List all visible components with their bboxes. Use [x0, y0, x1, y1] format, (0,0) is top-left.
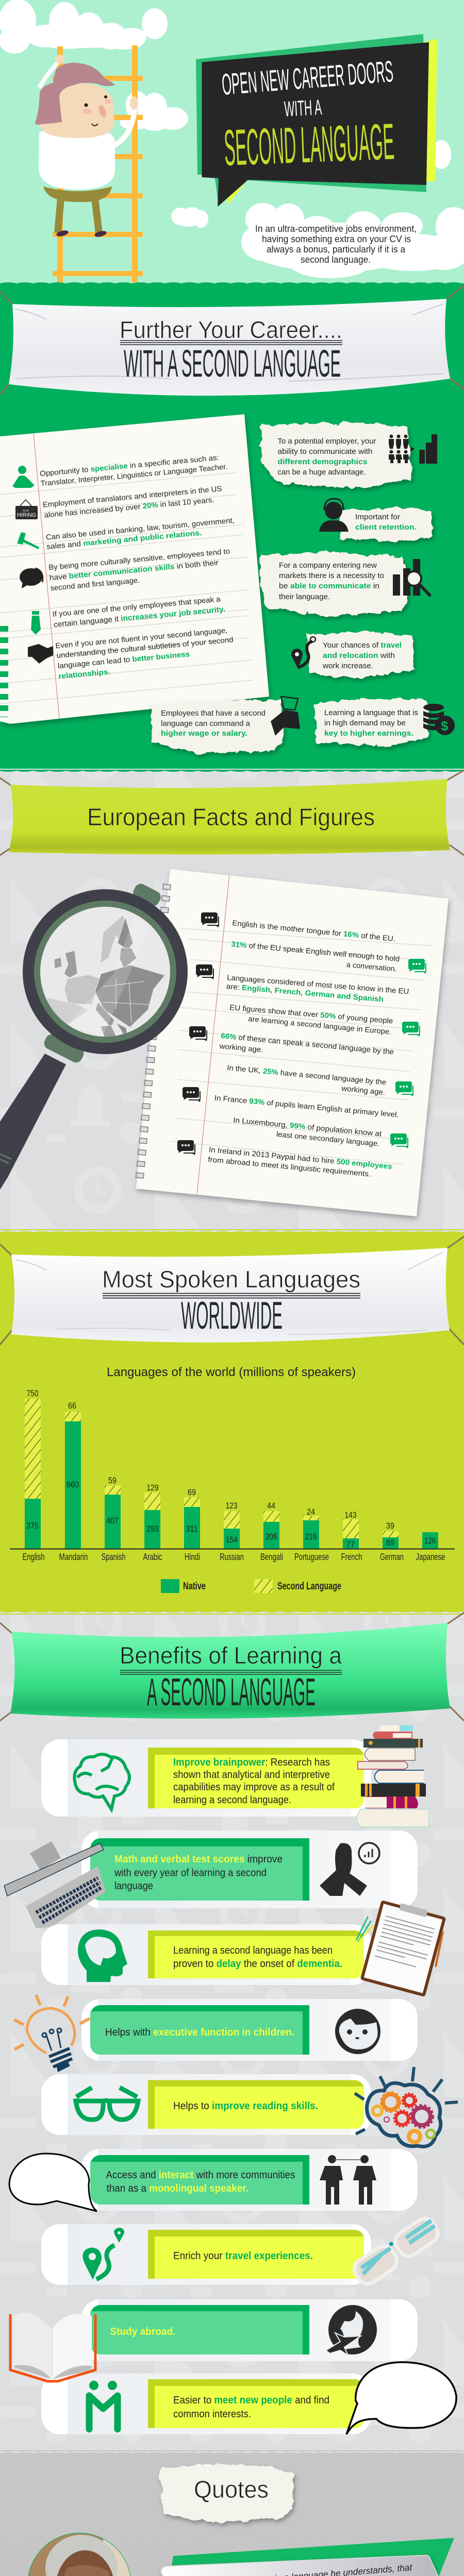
title text: [221, 55, 395, 176]
banner heading: European Facts and Figures: [87, 803, 375, 831]
paper text lines: Languages considered of most use to know in the EU: [227, 974, 409, 996]
paper text lines: are learning a second language in Europe.: [248, 1015, 392, 1037]
card: executive function: Helps with executive function in children.: [105, 2027, 294, 2038]
paper text lines: language can lead to better business: [57, 650, 190, 670]
chart legend: Second Language: [277, 1581, 341, 1592]
paper text lines: EU figures show that over 50% of young people: [229, 1004, 393, 1026]
paper text lines: a conversation.: [346, 961, 397, 974]
card: improve brainpower: capabilities may improve as a result of: [173, 1782, 335, 1793]
card: meet new people: Easier to meet new people and find: [173, 2395, 329, 2406]
notebook paper: European facts: [136, 869, 449, 1216]
icon: headset agent: [319, 499, 349, 532]
quotes section background: [0, 2453, 464, 2576]
paper text lines: Opportunity to specialise in a specific area such as:: [39, 454, 219, 478]
notebook paper: career benefits: [0, 414, 269, 724]
paper text lines: English is the mother tongue for 16% of the EU.: [232, 919, 396, 943]
card: study abroad: [81, 2299, 418, 2361]
paper text lines: By being more culturally sensitive, employees tend to: [48, 547, 230, 572]
card: improve reading skills: Helps to improve reading skills.: [173, 2100, 318, 2112]
category labels: Bengali: [260, 1552, 283, 1562]
paper text lines: working age.: [219, 1042, 263, 1054]
banner heading: WORLDWIDE: [181, 1294, 283, 1337]
lime section background: [0, 1232, 464, 1612]
title speech bubble: [196, 34, 437, 207]
card: math and verbal test scores: [81, 1831, 418, 1908]
native bars: [25, 1421, 438, 1549]
category labels: English: [23, 1552, 44, 1562]
paper text lines: 66% of these can speak a second language by the: [221, 1032, 394, 1057]
wave edge hero to green: [0, 281, 464, 284]
card: delay dementia: [41, 1924, 371, 1985]
wave edge green to grey: [0, 769, 464, 772]
icon: businessman with chart bubble: [320, 1843, 379, 1896]
banner: most spoken languages: [0, 1236, 464, 1345]
bar value labels: 154: [226, 1535, 237, 1545]
note: travel and relocation: work increase.: [322, 662, 373, 670]
bar value labels: 89: [386, 1538, 394, 1548]
note: new markets: be able to communicate in: [279, 582, 379, 590]
icon: hand with money: [271, 697, 300, 736]
icon: light bulb: [14, 1995, 90, 2072]
second language bars: [25, 1399, 399, 1538]
magnifying glass over Europe map: [0, 882, 188, 1190]
icon: two people shaking hands: [89, 2381, 118, 2429]
paper text lines: least one secondary language.: [276, 1130, 380, 1148]
banner heading: Benefits of Learning a: [120, 1642, 342, 1669]
paper text lines: Translator, Interpreter, Linguistics or Language Teacher.: [40, 463, 228, 488]
intro text: having something extra on your CV is: [262, 234, 411, 244]
banner heading: Most Spoken Languages: [102, 1266, 360, 1293]
icon: tie: [31, 611, 41, 635]
grey section background: benefits: [0, 1612, 464, 2453]
intro text: always a bonus, particularly if it is a: [267, 244, 406, 255]
photo: Nelson Mandela: [26, 2532, 134, 2576]
bar chart: languages of the world: [10, 1388, 455, 1562]
icon: teal glasses: [351, 2214, 442, 2288]
paper text lines: In Ireland in 2013 Paypal had to hire 500 employees: [208, 1146, 392, 1171]
green section background: [0, 284, 464, 769]
card: study abroad: Study abroad.: [110, 2326, 175, 2337]
note: travel and relocation: Your chances of travel: [323, 641, 402, 650]
note: client retention: [319, 499, 432, 542]
bar value labels: 44: [267, 1501, 275, 1511]
bar value labels: 39: [386, 1521, 394, 1531]
note: different demographics: To a potential employer, your: [277, 437, 376, 446]
wave edge lime to grey: [0, 1612, 464, 1615]
bar value labels: 66: [68, 1401, 76, 1411]
banner heading: [120, 316, 342, 385]
banner heading: Further Your Career....: [120, 316, 342, 343]
clouds in hero: [0, 0, 464, 278]
paper text lines: If you are one of the only employees that speak a: [52, 595, 221, 619]
icon: stack of books: [357, 1725, 429, 1827]
quote bubble: Mandela: [158, 2538, 454, 2576]
note: client retention: client retention.: [355, 523, 417, 532]
paper text lines: working age.: [341, 1084, 386, 1097]
card: improve reading skills: [41, 2074, 371, 2135]
note: new markets: For a company entering new: [279, 562, 377, 570]
paper text lines: In the UK, 25% have a second language by the: [227, 1064, 387, 1087]
grey section background: European facts: [0, 769, 464, 1232]
chart legend: [161, 1579, 341, 1593]
bar value labels: 129: [146, 1483, 159, 1493]
paper text lines: 31% of the EU speak English well enough to hold: [231, 940, 400, 963]
note: new markets: markets there is a necessity to: [279, 572, 384, 580]
note: quotes heading: Quotes: [194, 2476, 269, 2503]
bar value labels: 750: [27, 1388, 38, 1398]
icon: handshake: [28, 644, 53, 664]
paper text lines: from abroad to meet its linguistic requirements.: [208, 1156, 371, 1179]
card: math and verbal test scores: language: [114, 1880, 153, 1892]
card: meet new people: common interests.: [173, 2409, 251, 2420]
ladder: [53, 45, 143, 282]
intro text: In an ultra-competitive jobs environment,: [255, 224, 417, 234]
paper text lines: Employment of translators and interpreters in the US: [42, 485, 222, 510]
bar value labels: 375: [27, 1521, 38, 1531]
bar value labels: 960: [67, 1480, 79, 1489]
note: client retention: Important for: [355, 513, 400, 521]
bar value labels: 77: [346, 1539, 355, 1549]
note: new markets: their language.: [279, 593, 330, 601]
hero background: [0, 0, 464, 284]
card: improve brainpower: [41, 1739, 371, 1817]
character climbing ladder: [35, 55, 138, 238]
note: different demographics: can be a huge advantage.: [277, 468, 366, 477]
bar value labels: 24: [307, 1507, 315, 1517]
bar value labels: 293: [146, 1524, 159, 1534]
spiral holes: [0, 626, 8, 717]
category labels: French: [341, 1552, 362, 1562]
card: math and verbal test scores: with every year of learning a second: [114, 1867, 267, 1878]
bar value labels: 123: [226, 1501, 237, 1511]
chart title: Languages of the world (millions of speakers): [107, 1365, 356, 1379]
category labels: German: [380, 1552, 404, 1562]
paper text lines: In France 93% of pupils learn English at primary level.: [214, 1094, 399, 1120]
icon: people and bars: [389, 434, 437, 464]
card: executive function: [81, 1999, 418, 2061]
card: interact with communities: Access and interact with more communities: [106, 2170, 295, 2181]
chart legend: Native: [183, 1581, 206, 1592]
icon: speech bubbles: [20, 568, 43, 588]
paper text lines: [39, 454, 235, 681]
paper text lines: understanding the cultural subtleties of your second: [56, 636, 234, 660]
banner: European facts: [0, 770, 464, 855]
category labels: Mandarin: [59, 1552, 88, 1562]
card: travel experiences: [41, 2224, 371, 2285]
bar value labels: 216: [305, 1532, 317, 1541]
note: higher earnings: key to higher earnings.: [324, 730, 413, 738]
icon: person reading: [12, 466, 35, 488]
icon: chat bubbles: [177, 912, 219, 1155]
note: travel and relocation: and relocation with: [323, 652, 395, 660]
title text: WITH A: [284, 95, 322, 121]
category labels: Portuguese: [294, 1552, 329, 1562]
card: improve brainpower: learning a second language.: [173, 1794, 291, 1806]
bar value labels: [27, 1388, 436, 1549]
note: different demographics: ability to communicate with: [277, 448, 372, 456]
icon: globe with plane: [326, 2305, 377, 2355]
note: higher wage: Employees that have a second: [161, 709, 266, 718]
paper text lines: Can also be used in banking, law, tourism, government,: [45, 516, 235, 542]
paper text lines: [208, 919, 409, 1179]
note: higher wage: higher wage or salary.: [161, 730, 247, 738]
icon: brain with gears: [355, 2067, 458, 2146]
bar value labels: 143: [344, 1510, 357, 1520]
card: delay dementia: proven to delay the onset of dementia.: [173, 1958, 342, 1970]
icon: now hiring sign: [15, 500, 38, 519]
paper text lines: sales and marketing and public relations.: [46, 529, 202, 551]
icon: map route: [82, 2228, 124, 2280]
note: higher earnings: Learning a language that is: [324, 709, 418, 717]
note: travel and relocation: [291, 631, 415, 678]
intro text: [255, 224, 417, 265]
category labels: Arabic: [143, 1552, 162, 1562]
category labels: Russian: [220, 1552, 244, 1562]
card: interact with communities: [81, 2149, 418, 2211]
icon: speech bubble left: [9, 2154, 97, 2211]
category labels: Japanese: [416, 1552, 445, 1562]
paper text lines: In Luxembourg, 99% of population know at: [233, 1116, 382, 1139]
paper text lines: have better communication skills in both their: [49, 559, 219, 582]
paper text lines: relationships.: [58, 668, 111, 681]
card: meet new people: [41, 2374, 371, 2434]
icon: child face: [335, 2009, 380, 2054]
note: different demographics: [260, 422, 437, 487]
note: higher wage: [151, 697, 300, 753]
icon: glasses: [76, 2088, 138, 2120]
bar value labels: 206: [265, 1532, 277, 1541]
category labels: [23, 1552, 445, 1562]
icon: laptop keyboard: [4, 1841, 106, 1928]
paper text lines: second and first language.: [50, 577, 140, 592]
wave edge grey to quotes: [0, 2450, 464, 2453]
note: higher earnings: [314, 699, 455, 746]
card: improve brainpower: Improve brainpower: Research has: [173, 1757, 330, 1768]
icon: speech bubble right: [346, 2362, 456, 2434]
map of Europe: [47, 914, 165, 1046]
note: different demographics: different demographics: [277, 458, 367, 466]
wave edge grey to lime: [0, 1229, 464, 1232]
icon: gavel: [17, 532, 39, 549]
icon: two people with tin-can phone: [320, 2155, 376, 2205]
paper text lines: certain language it increases your job security.: [53, 605, 225, 629]
note: quotes heading: [159, 2464, 294, 2522]
note: new markets: [260, 552, 430, 616]
paper text lines: Even if you are not fluent in your second language,: [55, 626, 228, 650]
note: higher wage: language can command a: [161, 720, 251, 728]
card: travel experiences: Enrich your travel experiences.: [173, 2250, 313, 2262]
bar value labels: 69: [188, 1487, 196, 1497]
icon: now hiring sign: NOW: [23, 510, 29, 513]
icon: head with brain: [78, 1929, 127, 1982]
paper text lines: are: English, French, German and Spanish: [226, 982, 384, 1004]
banner heading: [102, 1266, 360, 1337]
bar value labels: 126: [424, 1536, 436, 1546]
icon: brain outline: [74, 1754, 129, 1809]
intro text: second language.: [301, 255, 371, 265]
category labels: Spanish: [101, 1552, 126, 1562]
card: improve brainpower: shown that analytical and interpretive: [173, 1769, 330, 1781]
card: interact with communities: than as a monolingual speaker.: [107, 2183, 248, 2194]
banner: further your career: [0, 286, 464, 396]
card: delay dementia: Learning a second language has been: [173, 1945, 333, 1956]
banner: benefits of learning: [0, 1613, 464, 1721]
icon: coins and dollar: [423, 704, 455, 735]
icon: map route: [291, 637, 316, 669]
spiral holes: [139, 884, 167, 1182]
note: higher earnings: in high demand may be: [324, 719, 406, 727]
icon: open book: [10, 2313, 95, 2381]
icon: green chat bubbles: [390, 959, 426, 1148]
bar value labels: 59: [108, 1476, 117, 1485]
icon: bars and magnifier: [393, 559, 430, 596]
bar value labels: 311: [186, 1524, 198, 1534]
banner heading: [120, 1642, 342, 1714]
paper text lines: alone has increased by over 20% in last 10 years.: [44, 496, 214, 520]
icon: coins and dollar: $: [441, 718, 449, 734]
card: math and verbal test scores: Math and verbal test scores improve: [114, 1854, 283, 1865]
icon: now hiring sign: HIRING: [17, 512, 36, 518]
category labels: Hindi: [185, 1552, 200, 1562]
icon: clipboard: [346, 1894, 449, 1997]
bar value labels: 407: [106, 1516, 119, 1526]
